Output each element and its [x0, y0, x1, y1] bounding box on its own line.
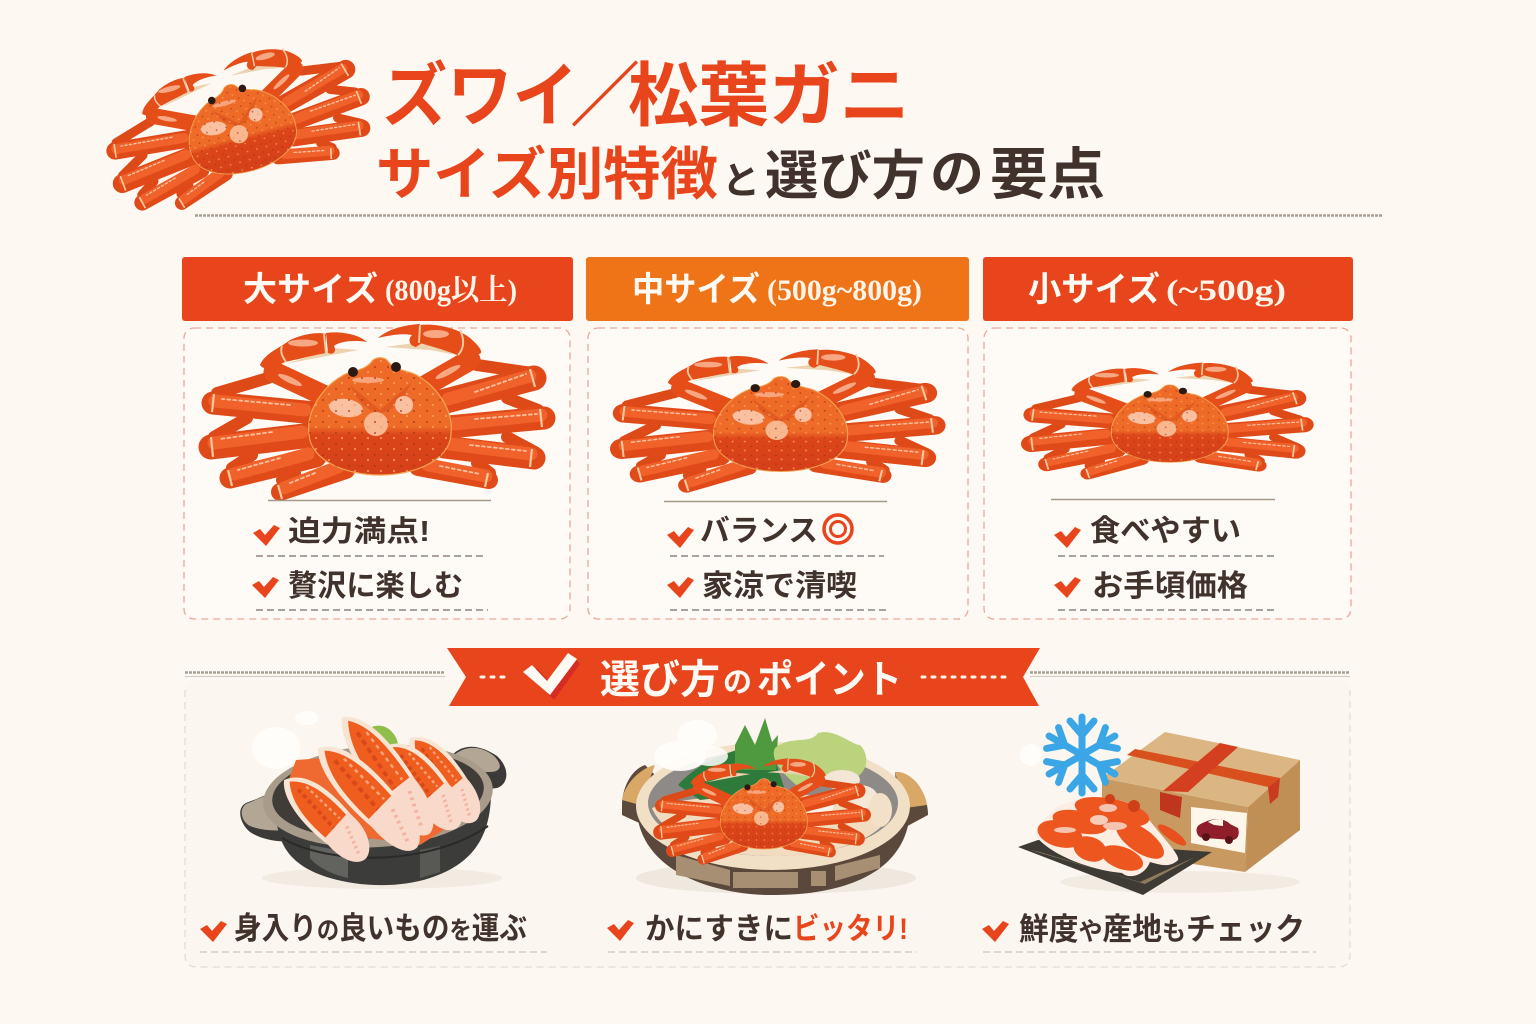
subtitle: [376, 143, 1105, 207]
crab illustration medium: [622, 349, 935, 491]
check item: 食べやすい: [1054, 515, 1274, 556]
check item: バランス◎: [667, 515, 884, 556]
title: ／: [570, 57, 640, 135]
label: かにすきにビッタリ!: ビッタリ!: [793, 913, 908, 946]
card frame: [984, 328, 1351, 619]
panel: selection points: [185, 648, 1350, 967]
check item: 食べやすい: 食べやすい: [1090, 515, 1241, 548]
illustration: frozen crab delivery box: [1018, 717, 1300, 895]
label: かにすきにビッタリ!: かにすきに: [645, 913, 793, 946]
panel: medium size: [586, 257, 969, 619]
title: ズワイ: [382, 57, 578, 135]
check item: 迫力満点: [253, 515, 485, 556]
label: 身入りの良いものを運ぶ: 身入りの良いものを運ぶ: [234, 911, 527, 946]
banner: [447, 648, 1040, 706]
header: small size: 小サイズ: [1028, 270, 1160, 309]
check item: お手頃価格: お手頃価格: [1092, 570, 1248, 603]
illustration: kanisuki hot pot: [622, 718, 928, 895]
check item: 家涼で清喫: 家涼で清喫: [702, 570, 857, 603]
title: [382, 57, 910, 135]
header: medium size: (500g~800g): [767, 274, 922, 307]
header: small size: [983, 257, 1353, 321]
card frame: [184, 328, 570, 619]
subtitle: の: [930, 146, 984, 204]
banner: の: [723, 667, 752, 699]
subtitle: 選び方: [765, 147, 925, 206]
check item: 贅沢に楽しむ: 贅沢に楽しむ: [288, 570, 463, 603]
banner: ポイント: [757, 659, 902, 702]
header: large size: (800g以上): [385, 274, 517, 307]
panel: small size: [983, 257, 1353, 619]
check item: 贅沢に楽しむ: [252, 570, 488, 610]
header divider: [195, 214, 1382, 217]
header: medium size: 中サイズ: [632, 270, 760, 309]
icon: snowflake: [1043, 717, 1121, 793]
title: 松葉ガニ: [628, 57, 910, 135]
delivery box: [1102, 732, 1300, 872]
banner: 選び方: [600, 658, 720, 702]
banner check icon: [523, 653, 580, 700]
subtitle: サイズ別特徴: [376, 143, 718, 207]
card frame: [588, 328, 968, 619]
illustration: crab legs in black pot: [240, 704, 506, 889]
points panel frame: [185, 680, 1350, 967]
header: large size: [182, 257, 573, 321]
header: small size: (~500g): [1166, 274, 1286, 307]
tray with crab meat: [1018, 791, 1212, 895]
crab illustration small: [1031, 363, 1304, 478]
check item: 家涼で清喫: [667, 570, 888, 610]
label: 鮮度や産地もチェック: 鮮度や産地もチェック: [1019, 912, 1305, 947]
header: medium size: [586, 257, 969, 321]
header: large size: 大サイズ: [243, 270, 378, 309]
crab illustration large: [211, 324, 544, 499]
subtitle: 要点: [990, 143, 1105, 206]
check item: バランス◎: バランス: [700, 515, 818, 548]
check item: お手頃価格: [1054, 570, 1277, 610]
panel: large size: [182, 257, 573, 619]
check item: 迫力満点: 迫力満点!: [288, 515, 430, 548]
icon: header crab: [98, 28, 377, 222]
subtitle: と: [722, 161, 760, 203]
label: かにすきにビッタリ!: [607, 913, 917, 952]
